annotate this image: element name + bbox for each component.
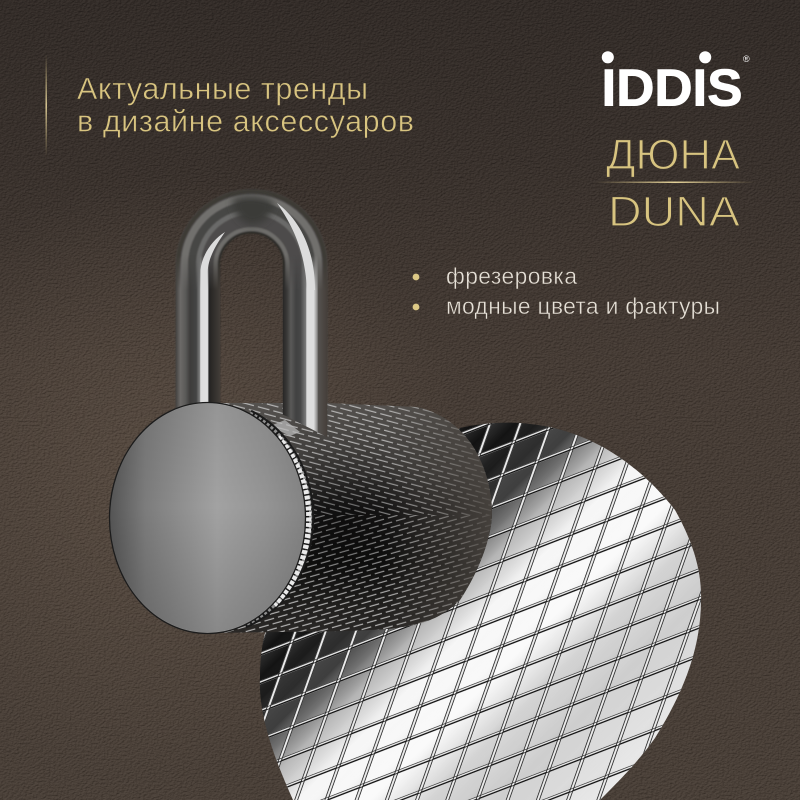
feature list xyxy=(413,263,720,319)
knob: knurled cylinder xyxy=(222,403,492,633)
product name xyxy=(606,131,740,236)
name divider xyxy=(595,182,755,183)
feature list: фрезеровка xyxy=(446,263,577,289)
knob: flat end face xyxy=(110,402,306,634)
accent vertical line xyxy=(46,54,47,157)
product name: DUNA xyxy=(608,188,740,236)
wall mount loop xyxy=(176,191,327,445)
heading xyxy=(77,72,414,138)
heading: в дизайне аксессуаров xyxy=(77,104,414,138)
logo: IDDIS: IDDIS xyxy=(602,60,742,118)
knob: serrated rim xyxy=(245,413,311,625)
feature list: модные цвета и фактуры xyxy=(446,293,720,319)
heading: Актуальные тренды xyxy=(77,72,368,106)
logo: IDDIS: ® xyxy=(743,54,750,64)
knurled texture close-up xyxy=(260,423,701,800)
product name: ДЮНА xyxy=(606,131,740,179)
